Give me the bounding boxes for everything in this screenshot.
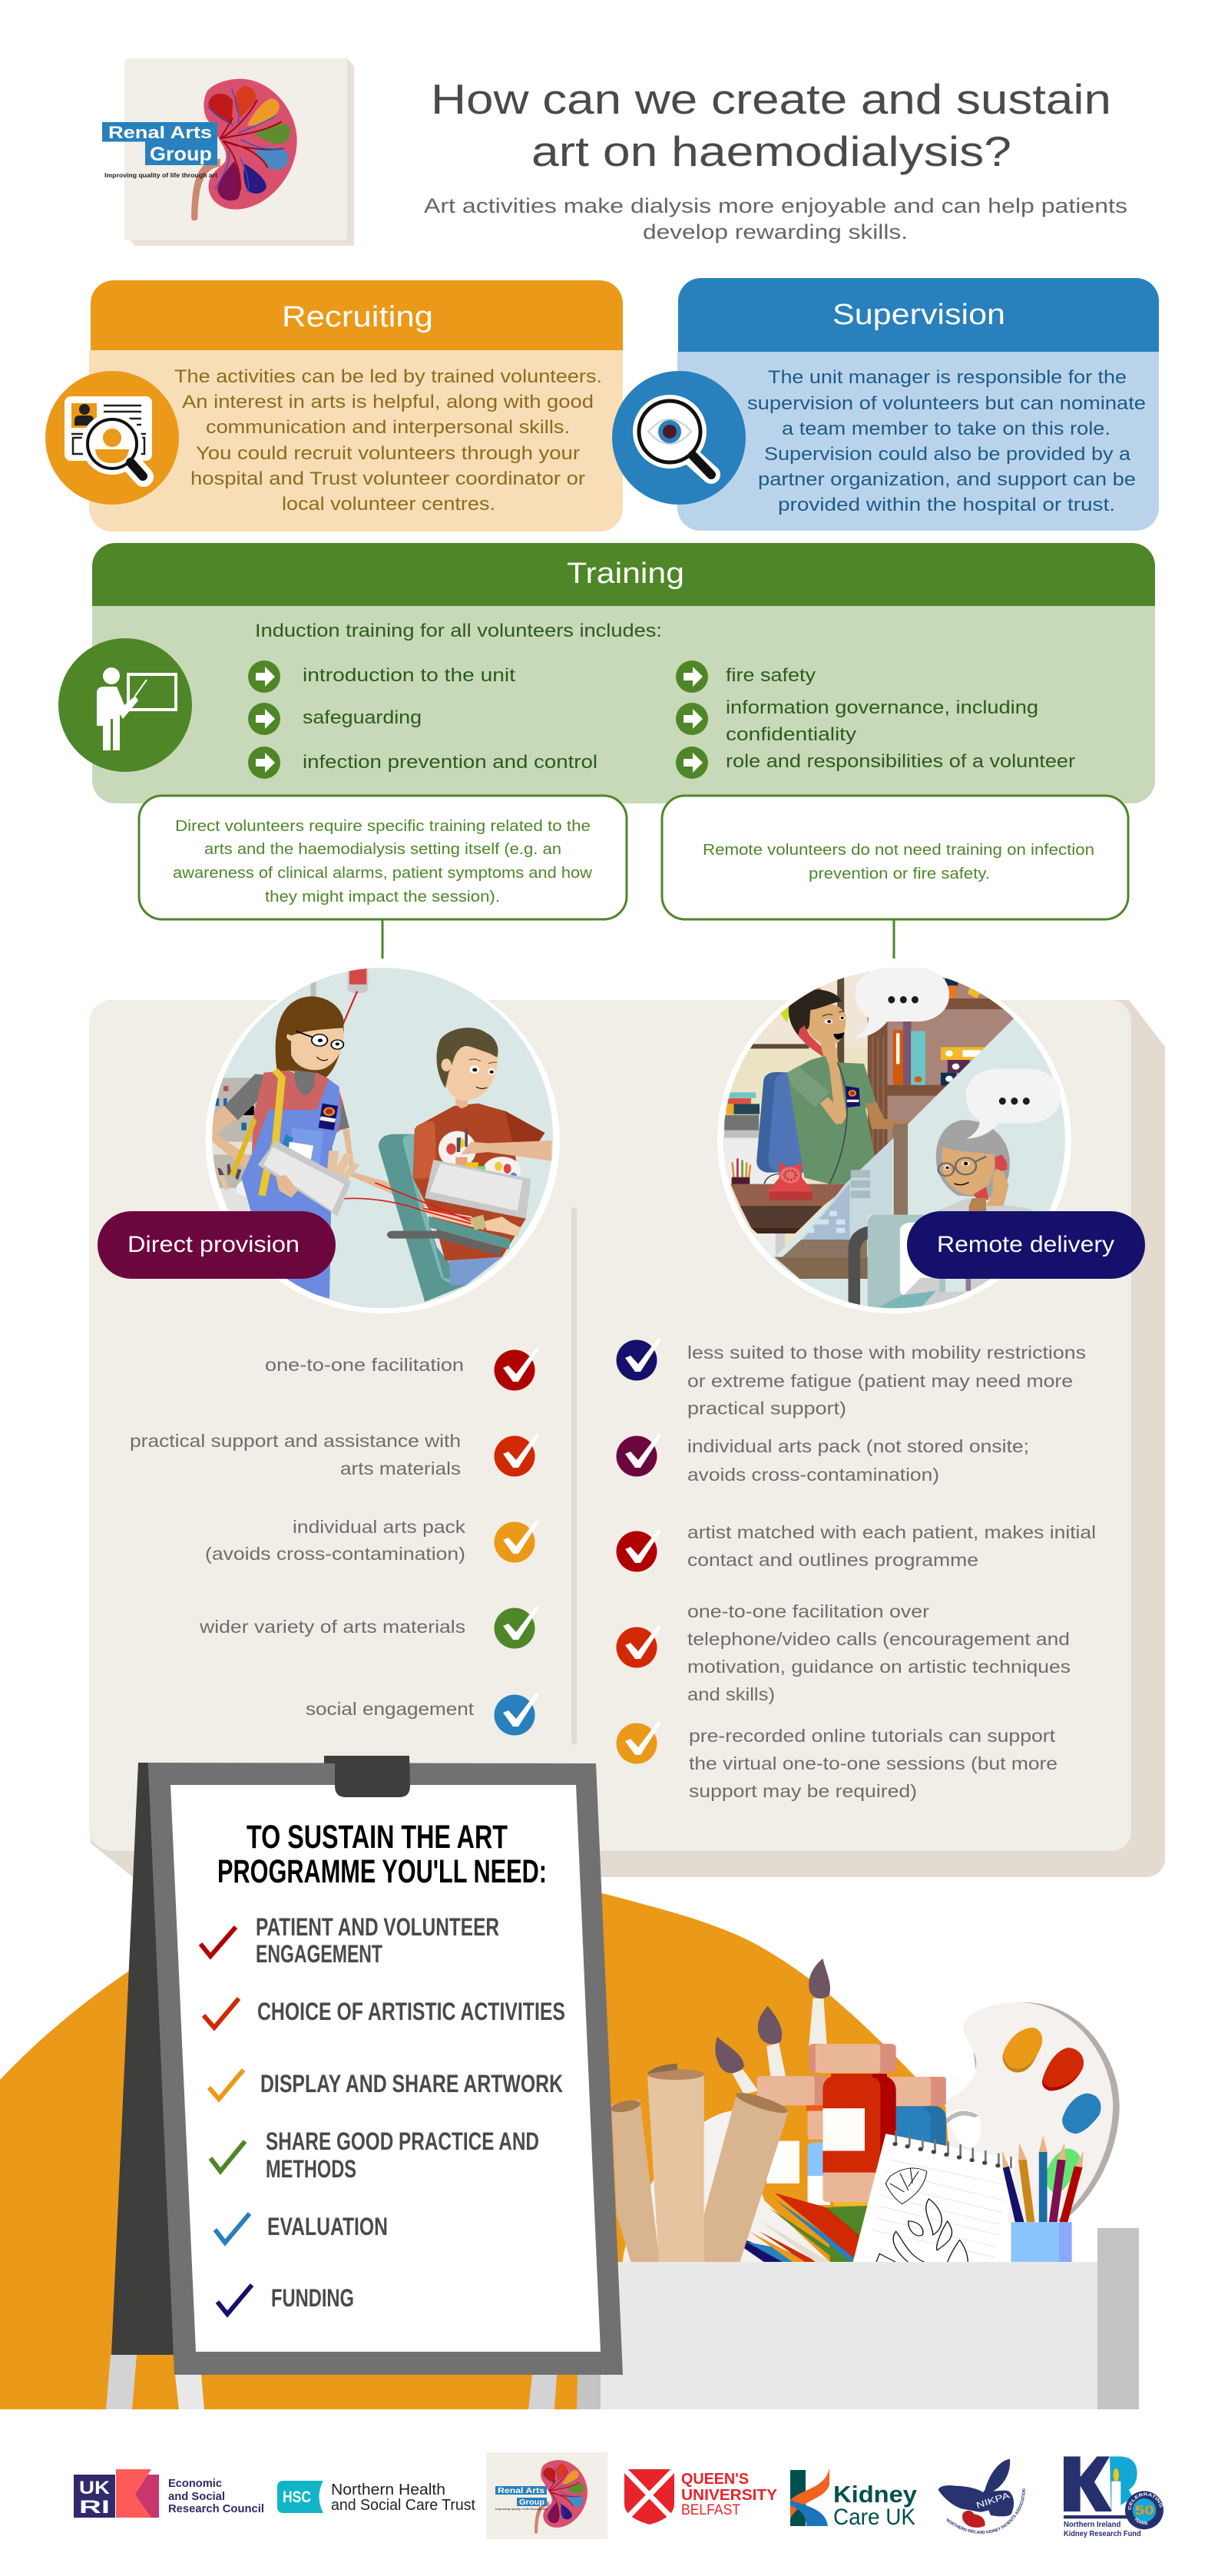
list: direct provision benefits xyxy=(130,1348,539,1736)
title: art on haemodialysis? xyxy=(531,127,1011,175)
callout: direct volunteers: arts and the haemodialysis setting itself (e.g. an xyxy=(204,841,561,858)
logo: Northern Ireland Kidney Research Fund: Kidney Research Fund xyxy=(1064,2530,1141,2538)
easel legs xyxy=(106,2355,601,2409)
logo: NIKPA butterfly xyxy=(938,2459,1026,2534)
item: one-to-one facilitation: one-to-one facilitation xyxy=(265,1355,464,1375)
logo: Renal Arts Group card: Group xyxy=(150,144,212,165)
sign item: evaluation: EVALUATION xyxy=(267,2213,388,2240)
recruiting body text: You could recruit volunteers through your xyxy=(196,443,580,464)
item: wider variety xyxy=(199,1606,539,1648)
logo: Northern Health and Social Care Trust: Northern Health xyxy=(331,2482,445,2498)
item: practical support xyxy=(130,1431,539,1478)
panel: training xyxy=(58,543,1155,803)
speech bubble: patient xyxy=(966,1069,1061,1139)
recruiting body text: local volunteer centres. xyxy=(282,494,495,515)
logo: Renal Arts Group small: Improving quality of life through art xyxy=(495,2507,548,2511)
coloured paper fan xyxy=(740,2193,859,2263)
callout: remote volunteers: prevention or fire safety. xyxy=(809,866,990,882)
pencil cup xyxy=(1011,2222,1072,2263)
sign board: to sustain the art programme xyxy=(111,1756,623,2375)
supervision body text: provided within the hospital or trust. xyxy=(778,495,1115,515)
paint caps xyxy=(757,2044,946,2106)
title: How can we create and sustain xyxy=(431,75,1111,123)
orange backdrop shape xyxy=(0,1876,991,2409)
item: practical support: arts materials xyxy=(340,1459,461,1478)
item: artist matched: contact and outlines programme xyxy=(687,1550,978,1570)
callout: direct volunteers xyxy=(139,796,627,919)
item: telephone facilitation: and skills) xyxy=(687,1684,775,1704)
paint bottle: red xyxy=(823,2074,896,2263)
logo: UKRI ESRC: Economic xyxy=(168,2477,222,2490)
sign item: patient and volunteer engagement xyxy=(200,1913,499,1968)
recruiting body text: The activities can be led by trained volunteers. xyxy=(174,366,602,387)
list: left column: introduction to the unit xyxy=(303,665,515,686)
item: less suited: practical support) xyxy=(687,1398,846,1418)
logo: Queen's University Belfast xyxy=(624,2469,778,2525)
item: pre-recorded tutorials: the virtual one-to-one sessions (but more xyxy=(689,1753,1058,1773)
list: right column: information governance, including xyxy=(726,697,1038,718)
connector lines xyxy=(382,920,894,959)
illustration: direct provision scene xyxy=(205,965,560,1313)
heading: training: Training xyxy=(567,558,684,590)
sign item: funding: FUNDING xyxy=(271,2284,354,2312)
logo: Kidney Care UK: Kidney xyxy=(833,2481,918,2508)
panel: direct vs remote background xyxy=(89,1000,1165,1877)
supervision body text: supervision of volunteers but can nominate xyxy=(747,393,1146,414)
pill label: direct provision: Direct provision xyxy=(127,1232,300,1257)
pencils xyxy=(1002,2135,1084,2222)
logo: Renal Arts Group small: Renal Arts xyxy=(498,2487,545,2495)
logo: Northern Ireland Kidney Research Fund: 50 xyxy=(1135,2503,1154,2518)
list: remote delivery points xyxy=(616,1338,1096,1801)
logo: Northern Ireland Kidney Research Fund: Northern Ireland xyxy=(1064,2521,1120,2529)
logo: Northern Health and Social Care Trust xyxy=(277,2481,475,2514)
list: left column: infection prevention and control xyxy=(303,752,597,773)
sign item: share good practice and methods: SHARE GOOD PRACTICE AND xyxy=(266,2127,539,2155)
subtitle: Art activities make dialysis more enjoyable and can help patients xyxy=(424,194,1127,217)
sign heading: TO SUSTAIN THE ART xyxy=(247,1819,508,1856)
item: individual arts pack xyxy=(205,1517,539,1564)
item: individual arts pack: individual arts pack xyxy=(293,1517,466,1537)
logo: Queen's University Belfast: BELFAST xyxy=(681,2502,740,2518)
item: one-to-one facilitation xyxy=(265,1348,539,1390)
item: telephone facilitation: telephone/video calls (encouragement and xyxy=(687,1629,1070,1649)
logo: Queen's University Belfast: QUEEN'S xyxy=(681,2471,749,2488)
item: individual arts pack remote xyxy=(616,1434,1029,1485)
art box with supplies xyxy=(591,1958,1139,2409)
list: right column xyxy=(676,661,1075,779)
supervision body text: Supervision could also be provided by a xyxy=(764,444,1131,465)
item: individual arts pack: (avoids cross-contamination) xyxy=(205,1544,465,1564)
panel: supervision xyxy=(612,278,1159,531)
list: left column xyxy=(248,661,597,779)
brush 1 xyxy=(715,2037,758,2094)
item: social engagement: social engagement xyxy=(306,1699,475,1719)
logo: Northern Ireland Kidney Research Fund xyxy=(1063,2456,1163,2538)
logo: Renal Arts Group small xyxy=(486,2452,607,2539)
heading: recruiting: Recruiting xyxy=(282,301,433,333)
item: less suited: less suited to those with mobility restrictions xyxy=(687,1343,1086,1362)
sign item: patient and volunteer engagement: ENGAGEMENT xyxy=(256,1940,382,1968)
item: individual arts pack remote: individual arts pack (not stored onsite; xyxy=(687,1436,1029,1456)
sign item: display and share artwork xyxy=(209,2070,563,2099)
sign item: patient and volunteer engagement: PATIENT AND VOLUNTEER xyxy=(256,1913,499,1941)
recruiting body text xyxy=(174,366,602,515)
logo: Queen's University Belfast: UNIVERSITY xyxy=(681,2487,778,2504)
logo: Northern Health and Social Care Trust: HSC xyxy=(283,2488,311,2506)
sign item: funding xyxy=(217,2284,354,2314)
list: right column: role and responsibilities of a volunteer xyxy=(726,751,1075,772)
list: left column: safeguarding xyxy=(303,707,422,728)
subtitle xyxy=(424,194,1127,243)
icon: magnifier with eye xyxy=(612,371,746,505)
box front xyxy=(591,2262,1097,2409)
recruiting body text: An interest in arts is helpful, along with good xyxy=(182,392,594,412)
item: telephone facilitation: motivation, guidance on artistic techniques xyxy=(687,1657,1071,1677)
item: pre-recorded tutorials xyxy=(616,1721,1058,1801)
logo: UKRI ESRC xyxy=(74,2469,264,2518)
callout: remote volunteers: Remote volunteers do not need training on infection xyxy=(703,842,1094,859)
list: right column: fire safety xyxy=(726,665,816,686)
supervision body text: The unit manager is responsible for the xyxy=(768,367,1127,388)
pill label: direct provision xyxy=(98,1211,336,1279)
item: less suited xyxy=(616,1338,1086,1418)
icon: teacher at board xyxy=(58,638,192,772)
sign item: choice of artistic activities xyxy=(204,1998,565,2028)
logo: UKRI ESRC: Research Council xyxy=(168,2502,264,2515)
logo: Northern Ireland Kidney Research Fund: YEARS xyxy=(1135,2517,1147,2525)
logo: NIKPA butterfly: NIKPA xyxy=(975,2491,1011,2511)
brush 2 xyxy=(758,2006,786,2077)
item: telephone facilitation: one-to-one facilitation over xyxy=(687,1601,929,1621)
icon: ID card under magnifier xyxy=(45,371,179,505)
callout: direct volunteers: Direct volunteers require specific training related to the xyxy=(175,818,591,835)
palette xyxy=(945,2002,1120,2221)
brush 3 xyxy=(809,1958,830,2046)
box side xyxy=(1097,2228,1139,2409)
logo: NIKPA butterfly: NORTHERN IRELAND KIDNEY PATIENTS ASSOCIATION xyxy=(946,2488,1026,2534)
logo: Renal Arts Group card: Improving quality of life through art xyxy=(104,172,217,179)
callout: direct volunteers: they might impact the session). xyxy=(265,889,500,906)
panel: recruiting xyxy=(45,280,623,531)
item: telephone facilitation xyxy=(616,1601,1071,1704)
subtitle: develop rewarding skills. xyxy=(643,220,908,243)
item: social engagement xyxy=(306,1693,539,1736)
logo: Northern Health and Social Care Trust: and Social Care Trust xyxy=(331,2497,475,2514)
logo: UKRI ESRC: UK xyxy=(79,2478,111,2498)
callout: direct volunteers: awareness of clinical alarms, patient symptoms and how xyxy=(173,865,593,882)
item: practical support: practical support and assistance with xyxy=(130,1431,461,1451)
supervision body text: a team member to take on this role. xyxy=(782,419,1110,439)
supervision body text: partner organization, and support can be xyxy=(758,469,1136,490)
recruiting body text: communication and interpersonal skills. xyxy=(206,417,570,438)
title xyxy=(431,75,1111,175)
logo: UKRI ESRC: RI xyxy=(79,2497,110,2518)
heading: supervision: Supervision xyxy=(832,299,1005,331)
logo: Renal Arts Group card xyxy=(102,58,354,246)
logo: Renal Arts Group card: Renal Arts xyxy=(108,123,212,142)
item: pre-recorded tutorials: pre-recorded online tutorials can support xyxy=(689,1726,1056,1746)
item: less suited: or extreme fatigue (patient may need more xyxy=(687,1371,1073,1391)
item: pre-recorded tutorials: support may be required) xyxy=(689,1781,917,1801)
sign item: evaluation xyxy=(215,2213,388,2243)
sign item: share good practice and methods xyxy=(210,2127,539,2183)
item: artist matched xyxy=(616,1522,1096,1571)
rolls of paper xyxy=(609,2064,790,2263)
background palette and label xyxy=(623,2111,830,2263)
pill label: remote delivery: Remote delivery xyxy=(937,1232,1114,1257)
item: artist matched: artist matched with each patient, makes initial xyxy=(687,1522,1096,1542)
paint bottle: blue xyxy=(896,2106,946,2153)
illustration: remote delivery scene xyxy=(717,965,1074,1316)
art supplies xyxy=(609,1958,1120,2263)
recruiting body text: hospital and Trust volunteer coordinator or xyxy=(190,469,585,489)
induction intro text: Induction training for all volunteers includes: xyxy=(255,621,662,641)
sign heading: PROGRAMME YOU'LL NEED: xyxy=(217,1853,547,1890)
logo: Northern Ireland Kidney Research Fund: CELEBRATING xyxy=(1127,2493,1163,2510)
sign item: share good practice and methods: METHODS xyxy=(266,2155,356,2183)
logo: Renal Arts Group small: Group xyxy=(519,2498,544,2507)
notepad with leaf sketches xyxy=(852,2131,1015,2263)
callout: remote volunteers xyxy=(662,796,1128,919)
sign heading xyxy=(217,1819,547,1890)
logo: Kidney Care UK: Care UK xyxy=(833,2505,915,2530)
paint bottle: back stack xyxy=(766,2105,830,2205)
clip xyxy=(324,1756,410,1797)
pill label: remote delivery xyxy=(907,1211,1145,1279)
speech bubble: volunteer xyxy=(855,968,949,1038)
logo: UKRI ESRC: and Social xyxy=(168,2490,225,2503)
item: wider variety: wider variety of arts materials xyxy=(199,1617,465,1637)
item: individual arts pack remote: avoids cross-contamination) xyxy=(687,1465,939,1485)
supervision body text xyxy=(747,367,1146,515)
sign item: choice of artistic activities: CHOICE OF ARTISTIC ACTIVITIES xyxy=(257,1998,565,2025)
logo: Kidney Care UK xyxy=(790,2468,918,2530)
sign item: display and share artwork: DISPLAY AND SHARE ARTWORK xyxy=(260,2070,563,2098)
list: right column: confidentiality xyxy=(726,724,856,745)
